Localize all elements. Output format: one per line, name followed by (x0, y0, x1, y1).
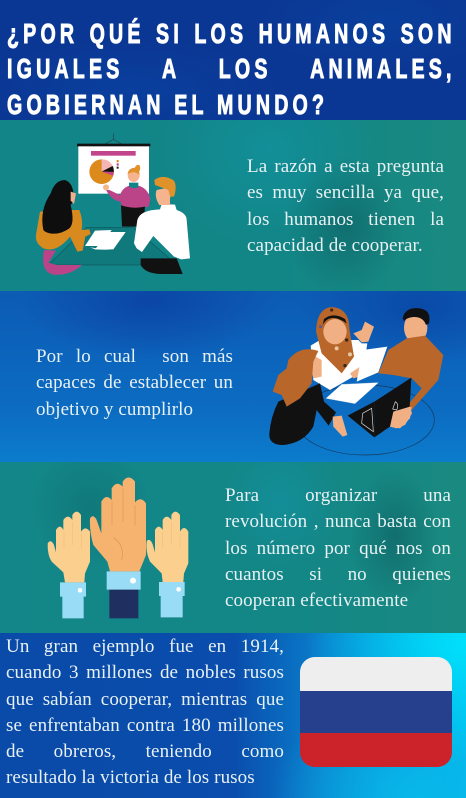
illustration: three people around a laptop (269, 307, 444, 456)
table outline (296, 385, 434, 455)
icon: Russian flag (300, 657, 452, 767)
text block: revolución: los número por qué nos on (225, 538, 451, 559)
text block: objetivo (36, 346, 233, 420)
text block: razón: capacidad de cooperar. (247, 235, 423, 256)
text block: revolución: Para organizar una (225, 485, 451, 506)
panel: objective (0, 291, 466, 462)
text block: revolución: cooperan efectivamente (225, 590, 408, 611)
text block: revolución: cuantos si no quienes (225, 564, 451, 585)
text block: ejemplo 1914: resultado la victoria de los rusos (6, 767, 255, 788)
text block: objetivo: Por lo cual son más (36, 346, 233, 367)
title: IGUALES A LOS ANIMALES, (7, 53, 456, 84)
icon: projection screen (77, 133, 150, 194)
panel: raised hands (0, 462, 466, 633)
paper sheet (326, 383, 378, 404)
text block: razón: los humanos tienen la (247, 209, 444, 230)
title: GOBIERNAN EL MUNDO? (7, 89, 328, 120)
text block: revolución: revolución , nunca basta con (225, 511, 451, 532)
title: ¿POR QUÉ SI LOS HUMANOS SON (7, 18, 456, 49)
illustration: three raised hands (48, 478, 188, 618)
illustration: team meeting with presentation (36, 133, 190, 275)
text block: objetivo: capaces de establecer un (36, 372, 233, 393)
text block: ejemplo 1914: cuando 3 millones de nobles rusos (6, 662, 284, 683)
panel: header (0, 0, 466, 120)
text block: ejemplo 1914: se enfrentaban contra 180 millones (6, 715, 284, 736)
text block: razón: es muy sencilla ya que, (247, 182, 444, 203)
figure: woman with black hair (36, 180, 91, 275)
panel: cooperation meeting (0, 120, 466, 291)
title (7, 18, 456, 120)
figure: presenter (103, 165, 150, 227)
papers on table (85, 230, 126, 250)
figure: man with white shirt (134, 177, 190, 274)
figure: man in brown sweater (378, 308, 443, 428)
icon: centre hand (90, 478, 146, 618)
panel: Russia example (0, 633, 466, 798)
text block: ejemplo 1914 (6, 636, 284, 788)
text block: revolución (225, 485, 451, 611)
laptop (348, 378, 412, 437)
text block: razón (247, 156, 444, 256)
text block: ejemplo 1914: de obreros, teniendo como (6, 741, 284, 762)
text block: ejemplo 1914: que sabían cooperar, mientras que (6, 689, 284, 710)
text block: objetivo: objetivo y cumplirlo (36, 399, 193, 420)
icon: left hand (48, 512, 90, 618)
figure: woman in headscarf (311, 307, 387, 390)
figure: woman with red hair (269, 349, 347, 445)
text block: razón: La razón a esta pregunta (247, 156, 444, 177)
table (48, 227, 177, 265)
text block: ejemplo 1914: Un gran ejemplo fue en 1914, (6, 636, 284, 657)
icon: right hand (146, 512, 188, 617)
